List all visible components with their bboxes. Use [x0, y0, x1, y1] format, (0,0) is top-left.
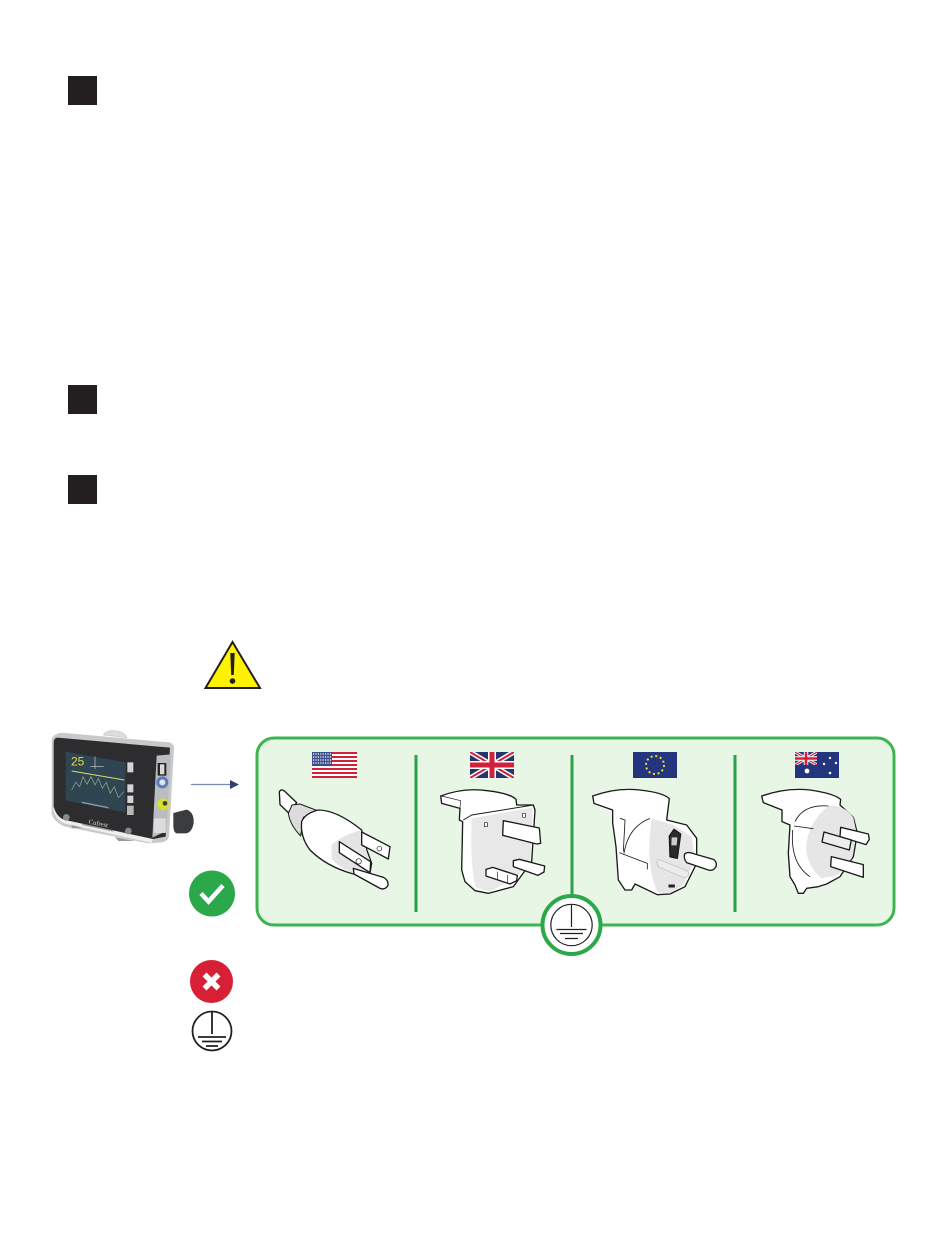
connector knob [173, 810, 194, 833]
arrow: device to plugs [191, 780, 239, 789]
icon: ground badge [542, 896, 600, 954]
plug: Australia [762, 789, 869, 893]
screen: 25 [71, 755, 85, 769]
flag: USA [312, 752, 357, 778]
icon: green check [189, 870, 235, 916]
icon: monitor device [52, 731, 194, 843]
step marker 2 [68, 385, 97, 414]
panel: grounded plugs [257, 738, 894, 954]
plug: USA [279, 790, 390, 889]
screen [66, 752, 126, 812]
icon: red cross [190, 960, 233, 1003]
plug: UK [441, 790, 545, 893]
step marker 1 [68, 76, 97, 105]
step marker 3 [68, 475, 97, 504]
flag: Australia [795, 752, 839, 778]
icon: warning triangle [206, 642, 260, 688]
flag: EU [633, 752, 677, 778]
flag: UK [470, 752, 514, 778]
icon: monitor device: Cufrest [88, 819, 109, 829]
plug: EU [593, 789, 716, 895]
side panel [152, 754, 171, 838]
icon: ground symbol [192, 1012, 232, 1050]
